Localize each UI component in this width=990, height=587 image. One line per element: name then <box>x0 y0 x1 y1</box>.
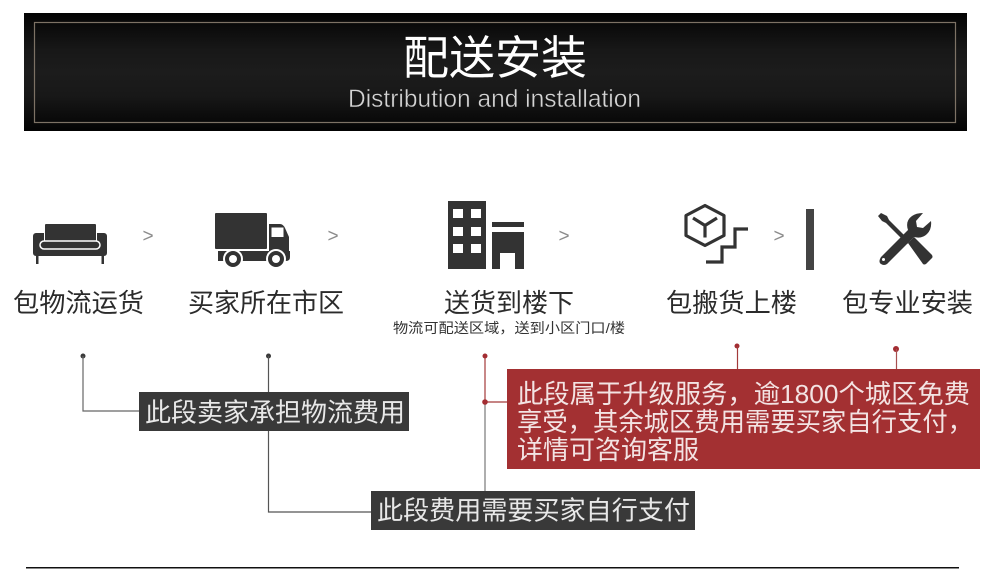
note: upgrade service: 此段属于升级服务，逾1800个城区免费 <box>517 379 970 409</box>
label: 送货到楼下 <box>444 288 574 318</box>
connector: step 4 to upgrade note <box>734 344 740 370</box>
title: 配送安装 <box>403 32 587 84</box>
step 5: installation <box>842 213 973 318</box>
connector: step 3 to notes <box>482 354 508 492</box>
note: buyer pays: 此段费用需要买家自行支付 <box>377 496 690 526</box>
label: 包搬货上楼 <box>666 288 797 318</box>
connector: step 5 to upgrade note <box>893 346 899 370</box>
step 4: carry upstairs <box>666 206 797 318</box>
icon: screwdriver and wrench <box>878 213 932 265</box>
icon: box and stairs <box>686 206 748 262</box>
note: seller pays freight: 此段卖家承担物流费用 <box>145 398 405 428</box>
icon: truck <box>215 213 290 268</box>
label: 包物流运货 <box>13 288 144 318</box>
step 3: delivered downstairs <box>393 201 625 336</box>
arrow 2: > <box>328 226 339 247</box>
header banner <box>24 13 967 131</box>
note: upgrade service <box>507 369 980 469</box>
note: 物流可配送区域，送到小区门口/楼 <box>393 320 625 336</box>
connector: step 1 to seller note <box>80 354 139 411</box>
note: upgrade service: 享受，其余城区费用需要买家自行支付， <box>517 407 973 437</box>
connector: step 2 to notes <box>266 354 372 512</box>
step 1: freight <box>13 224 144 318</box>
arrow 4: > <box>774 226 785 247</box>
subtitle: Distribution and installation <box>348 85 641 113</box>
bottom rule <box>26 567 959 568</box>
label: 包专业安装 <box>842 288 973 318</box>
arrow 3: > <box>558 226 570 247</box>
label: 买家所在市区 <box>188 288 344 318</box>
icon: buildings <box>448 201 524 269</box>
divider bar <box>806 209 814 270</box>
arrow 1: > <box>142 226 154 247</box>
note: upgrade service: 详情可咨询客服 <box>517 435 699 465</box>
step 2: buyer's city <box>188 213 344 318</box>
icon: sofa <box>33 224 107 264</box>
